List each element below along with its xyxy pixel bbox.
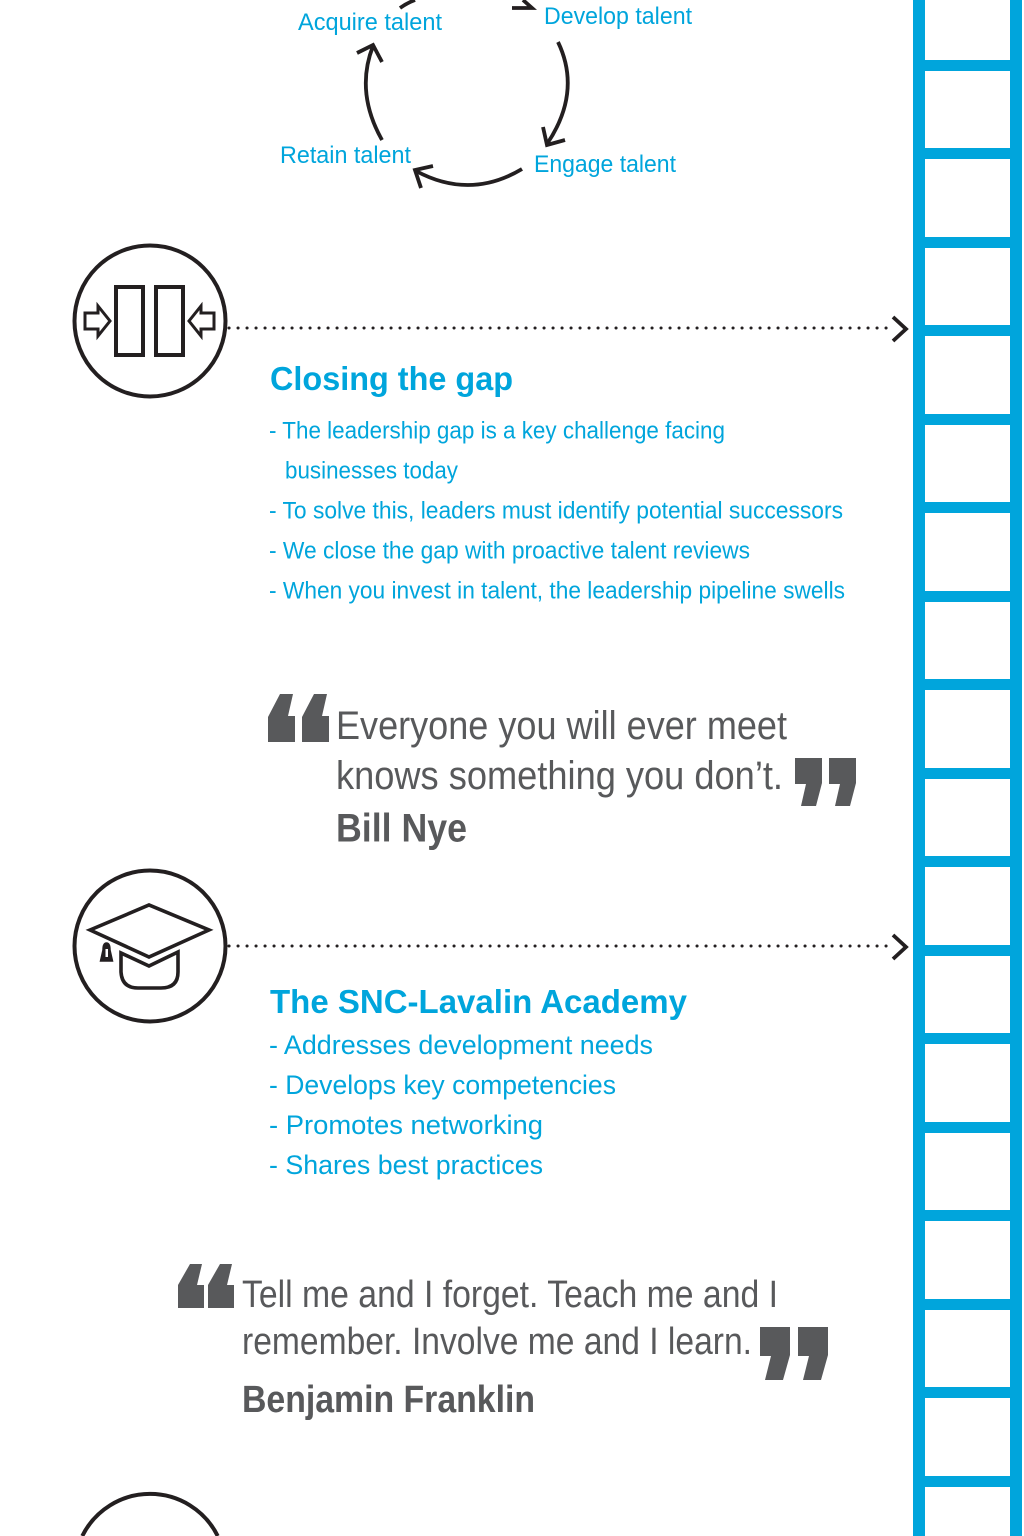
label: develop talent: Develop talent — [544, 3, 692, 30]
bullet list: academy: - Shares best practices — [269, 1150, 543, 1180]
close quotation mark — [795, 758, 856, 806]
quote text: Everyone you will ever meet — [336, 704, 787, 748]
dotted arrow: academy — [229, 935, 906, 959]
section: closing the gap — [269, 360, 845, 604]
bullet list: academy: - Addresses development needs — [269, 1030, 653, 1060]
bullet list: closing the gap: - We close the gap with proactive talent reviews — [269, 538, 750, 564]
section: the SNC-Lavalin Academy — [269, 983, 688, 1180]
talent cycle diagram — [280, 0, 692, 188]
label: retain talent: Retain talent — [280, 142, 411, 169]
bullet list: closing the gap: businesses today — [285, 458, 458, 484]
bullet list: closing the gap: - The leadership gap is a key challenge facing — [269, 418, 725, 444]
close quotation mark — [760, 1327, 828, 1380]
icon: partially visible circle — [82, 1494, 218, 1536]
bullet list: academy — [269, 1030, 653, 1180]
label: acquire talent: Acquire talent — [298, 9, 442, 36]
label: engage talent: Engage talent — [534, 151, 676, 178]
quote author: Benjamin Franklin — [242, 1379, 535, 1421]
quote: Bill Nye: knows something you don’t. — [336, 754, 783, 798]
arrow: engage to retain — [415, 166, 522, 188]
quote: Bill Nye — [268, 694, 856, 850]
heading: academy: The SNC-Lavalin Academy — [270, 983, 688, 1020]
bullet list: closing the gap — [269, 418, 845, 604]
quote: Benjamin Franklin — [178, 1264, 828, 1421]
quote author: Bill Nye — [336, 806, 467, 850]
quote: Benjamin Franklin: remember. Involve me and I learn. — [242, 1321, 752, 1363]
open quotation mark — [268, 694, 329, 742]
ladder — [913, 0, 1022, 1536]
arrow: retain to acquire — [357, 45, 382, 140]
open quotation mark — [178, 1264, 234, 1308]
arrow: acquire to develop — [400, 0, 532, 8]
bullet list: closing the gap: - When you invest in talent, the leadership pipeline swells — [269, 578, 845, 604]
icon: graduation cap — [74, 870, 226, 1022]
heading: closing the gap: Closing the gap — [270, 360, 513, 397]
arrow: develop to engage — [543, 42, 568, 145]
bullet list: academy: - Promotes networking — [269, 1110, 543, 1140]
dotted arrow: closing the gap — [229, 317, 906, 341]
icon: closing the gap — [74, 246, 226, 396]
bullet list: academy: - Develops key competencies — [269, 1070, 616, 1100]
bullet list: closing the gap: - To solve this, leaders must identify potential successors — [269, 498, 843, 524]
quote text: Tell me and I forget. Teach me and I — [242, 1274, 778, 1316]
